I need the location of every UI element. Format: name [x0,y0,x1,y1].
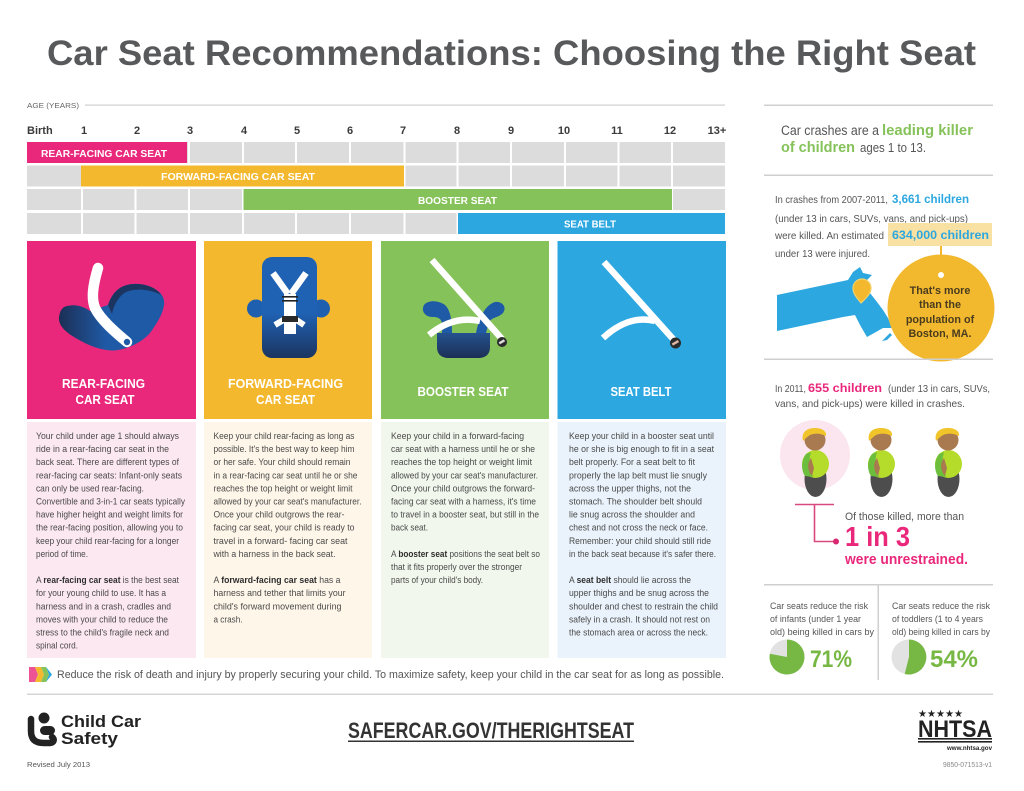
text panel: rear-facing description: rear-facing car seats: Infant-only seats [36,470,183,480]
panel label [62,377,145,407]
text panel: forward-facing description: a crash. [214,614,242,624]
text panel: seat belt description: safely in a crash. It should not rest on [569,614,710,624]
text panel: rear-facing description: stress to the child's fragile neck and [36,628,169,638]
logo: Child Car Safety: Safety [61,730,119,748]
text panel: seat belt description: he or she is big enough to fit in a seat [569,444,715,454]
sidebar: unrestrained statistics: vans, and pick-ups) were killed in crashes. [775,399,965,410]
logo: Child Car Safety [31,712,142,748]
stat: infants 71% [770,601,874,675]
sidebar: leading killer: Car crashes are a [781,123,879,138]
icon: colored arrows [29,667,52,682]
stat: infants 71%: 71% [810,646,852,673]
text panel: forward-facing description: Once your child outgrows the rear- [214,510,345,520]
text panel: rear-facing description: Convertible and 3-in-1 car seats typically [36,496,186,506]
callout: 1 in 3: Of those killed, more than [845,511,964,523]
logo: Child Car Safety: Child Car [61,713,142,731]
panel label: REAR-FACING [62,377,145,391]
age tick labels [27,125,726,137]
text panel: rear-facing description: A rear-facing car seat is the best seat [36,575,180,585]
panel: seat belt [558,241,726,419]
text panel: seat belt description: A seat belt should lie across the [569,575,691,585]
highlight circle [780,420,850,490]
age tick labels: 3 [187,125,193,137]
logo: NHTSA [918,709,993,752]
text panel: booster seat description: car seat with a harness until he or she [391,444,535,454]
sidebar: leading killer: leading killer [882,123,973,139]
stat: toddlers 54%: old) being killed in cars by [892,627,990,638]
text panel: booster seat description: parts of your child's body. [391,575,483,585]
safety note with arrows: Reduce the risk of death and injury by properly securing your child. To maximize safety, keep your child in the car seat for as long as possible. [57,669,724,681]
text panel: booster seat description: back seat. [391,523,428,533]
text panel: seat belt description: chest and not cross the neck or face. [569,523,708,533]
text panel: forward-facing description: A forward-facing car seat has a [214,575,341,585]
bar: forward-facing car seat: FORWARD-FACING CAR SEAT [161,171,316,183]
callout: population of Boston: population of [906,314,975,326]
text panel: forward-facing description: harness and tether that limits your [214,588,346,598]
text panel: seat belt description: Remember: your child should still ride [569,536,711,546]
text panel: booster seat description: facing car seat with a harness, it's time [391,496,536,506]
text panel: seat belt description: across the upper thighs, not the [569,483,691,493]
publication number: 9850-071513-v1 [943,762,992,769]
bar: seat belt: SEAT BELT [564,218,617,230]
stat: infants 71%: old) being killed in cars by [770,627,874,638]
text panel: seat belt description: belt properly. For a seat belt to fit [569,457,696,467]
text panel: booster seat description: A booster seat positions the seat belt so [391,549,540,559]
text panel: booster seat description: to travel in a booster seat, but still in the [391,510,539,520]
sidebar: crash statistics and Boston callout: 3,661 children [892,192,969,206]
bar: booster seat: BOOSTER SEAT [418,195,498,207]
age timeline chart [27,101,726,234]
text panel: booster seat description [381,422,549,658]
stat: infants 71%: of infants (under 1 year [770,614,862,625]
callout: 1 in 3 [844,511,968,568]
text panel: booster seat description: reaches the top height or weight limit [391,457,533,467]
text panel: rear-facing description: harness and in a crash, cradles and [36,601,171,611]
panel label: CAR SEAT [76,393,135,407]
sidebar: unrestrained statistics: (under 13 in cars, SUVs, [888,384,990,395]
bar: seat belt [458,213,725,234]
text panel: forward-facing description: reaches the top height or weight limit [214,483,353,493]
text panel: seat belt description: shoulder and chest to restrain the child [569,601,718,611]
text panel: rear-facing description: moves with your child to reduce the [36,614,168,624]
callout: population of Boston: Boston, MA. [909,328,971,340]
panel label: SEAT BELT [610,385,672,399]
callout: 1 in 3: were unrestrained. [844,551,968,568]
panel label: BOOSTER SEAT [418,385,509,399]
age tick labels: 8 [454,125,460,137]
sidebar: unrestrained statistics: 655 children [808,381,882,395]
text panel: rear-facing description: back seat. There are different types of [36,457,180,467]
panel label: FORWARD-FACING [228,377,343,391]
sidebar: leading killer: of children [781,140,855,156]
icon: child 3 [935,428,962,497]
text panel: rear-facing description: keep your child rear-facing for a longer [36,536,179,546]
text panel: forward-facing description: with a harness in the back seat. [213,549,336,559]
callout: population of Boston: than the [919,299,961,311]
footer [27,694,993,769]
bar: forward-facing car seat [81,166,404,186]
panel: forward-facing car seat [204,241,372,419]
callout: population of Boston: That's more [910,285,970,297]
bar: rear-facing car seat [27,142,187,163]
text panel: rear-facing description [27,422,196,658]
logo: NHTSA: NHTSA [918,716,992,743]
age tick labels: 7 [400,125,406,137]
text panel: booster seat description: that it fits properly over the stronger [391,562,522,572]
logo: NHTSA: www.nhtsa.gov [946,746,993,752]
text panel: seat belt description: lie snug across the shoulder and [569,510,695,520]
title: Car Seat Recommendations: Choosing the Right Seat [47,34,976,73]
icon: forward-facing seat with harness [247,257,330,358]
text panel: seat belt description: stomach. The shoulder belt should [569,496,702,506]
divider between infant and toddler stats [878,585,879,680]
callout: population of Boston [888,246,994,362]
callout: 1 in 3: 1 in 3 [845,521,910,552]
stat: toddlers 54%: Car seats reduce the risk [892,601,990,612]
sidebar: crash statistics and Boston callout: were killed. An estimated [774,231,884,242]
text panel: rear-facing description: period of time. [36,549,88,559]
sidebar: leading killer: ages 1 to 13. [860,140,926,155]
age tick labels: 5 [294,125,300,137]
age tick labels: 11 [611,125,623,137]
map: Massachusetts [777,267,892,341]
highlight: injured count [888,223,992,246]
age tick labels: 10 [558,125,570,137]
age tick labels: 13+ [708,125,726,137]
pie chart: 54% [892,640,926,674]
text panel: seat belt description: in the back seat because it's safer there. [569,549,716,559]
text panel: forward-facing description: facing car seat, your child is ready to [214,523,355,533]
bar: booster seat [244,189,672,210]
icon: location pin [853,279,871,303]
stat: toddlers 54%: 54% [930,646,978,673]
panel: rear-facing car seat [27,241,196,419]
text panel: forward-facing description: child's forward movement during [214,601,342,611]
sidebar: crash statistics and Boston callout: In crashes from 2007-2011, [775,195,888,206]
website URL: SAFERCAR.GOV/THERIGHTSEAT [348,718,634,743]
icon: rear-facing seat [59,268,164,350]
text panel: rear-facing description: the rear-facing position, allowing you to [36,523,183,533]
revision note: Revised July 2013 [27,760,90,769]
sidebar: crash statistics and Boston callout [764,192,994,362]
age tick labels: 6 [347,125,353,137]
icon: booster seat with belt [423,260,507,358]
age tick labels: 4 [241,125,248,137]
text panel: seat belt description [558,422,726,658]
text panel: booster seat description: Keep your child in a forward-facing [391,431,524,441]
text panel: forward-facing description: Keep your child rear-facing as long as [214,431,355,441]
text panel: rear-facing description: ride in a rear-facing car seat in the [36,444,169,454]
panel label [228,377,343,407]
text panel: rear-facing description: for your young child to use. It has a [36,588,166,598]
highlight: injured count: 634,000 children [892,228,989,242]
text panel: seat belt description: upper thighs and be snug across the [569,588,709,598]
sidebar: leading killer [764,104,993,176]
sidebar: crash statistics and Boston callout: (under 13 in cars, SUVs, vans, and pick-ups) [775,214,968,225]
text panel: forward-facing description: in a rear-facing car seat until he or she [214,470,358,480]
bar: rear-facing car seat: REAR-FACING CAR SEAT [41,148,168,160]
age tick labels: 2 [134,125,140,137]
stat: toddlers 54% [892,601,990,674]
panel label: CAR SEAT [256,393,315,407]
pie chart: 71% [770,640,805,675]
text panel: forward-facing description: or her safe. Your child should remain [214,457,351,467]
panel: booster seat [381,241,549,419]
sidebar: crash statistics and Boston callout: under 13 were injured. [775,249,870,260]
text panel: seat belt description: the stomach area or across the neck. [569,628,708,638]
text panel: booster seat description: allowed by your car seat's manufacturer. [391,470,538,480]
text panel: rear-facing description: have higher height and weight limits for [36,510,183,520]
text panel: rear-facing description: Your child under age 1 should always [36,431,180,441]
age axis label: AGE (YEARS) [27,101,80,110]
sidebar: unrestrained statistics [764,381,993,586]
text panel: seat belt description: properly the lap belt must lie snugly [569,470,708,480]
text panel: seat belt description: Keep your child in a booster seat until [569,431,714,441]
bracket connector [795,504,839,544]
text panel: forward-facing description: possible. It's the best way to keep him [214,444,354,454]
age tick labels: 12 [664,125,676,137]
age tick labels: 9 [508,125,514,137]
logo: NHTSA: ★★★★★ [918,709,963,720]
stat: infants 71%: Car seats reduce the risk [770,601,868,612]
text panel: booster seat description: Once your child outgrows the forward- [391,483,535,493]
text panel: forward-facing description: travel in a forward- facing car seat [214,536,348,546]
text panel: rear-facing description: spinal cord. [36,641,78,651]
stat: toddlers 54%: of toddlers (1 to 4 years [892,614,983,625]
text panel: forward-facing description [204,422,372,658]
sidebar: unrestrained statistics: In 2011, [775,384,806,395]
text panel: rear-facing description: can only be used rear-facing. [36,483,144,493]
icon: seat belt [603,262,681,348]
text panel: forward-facing description: allowed by your car seat's manufacturer. [214,496,362,506]
age tick labels: 1 [81,125,87,137]
icon: child 2 [868,428,895,497]
icon: child 1 [802,428,829,497]
age tick labels: Birth [27,125,53,137]
